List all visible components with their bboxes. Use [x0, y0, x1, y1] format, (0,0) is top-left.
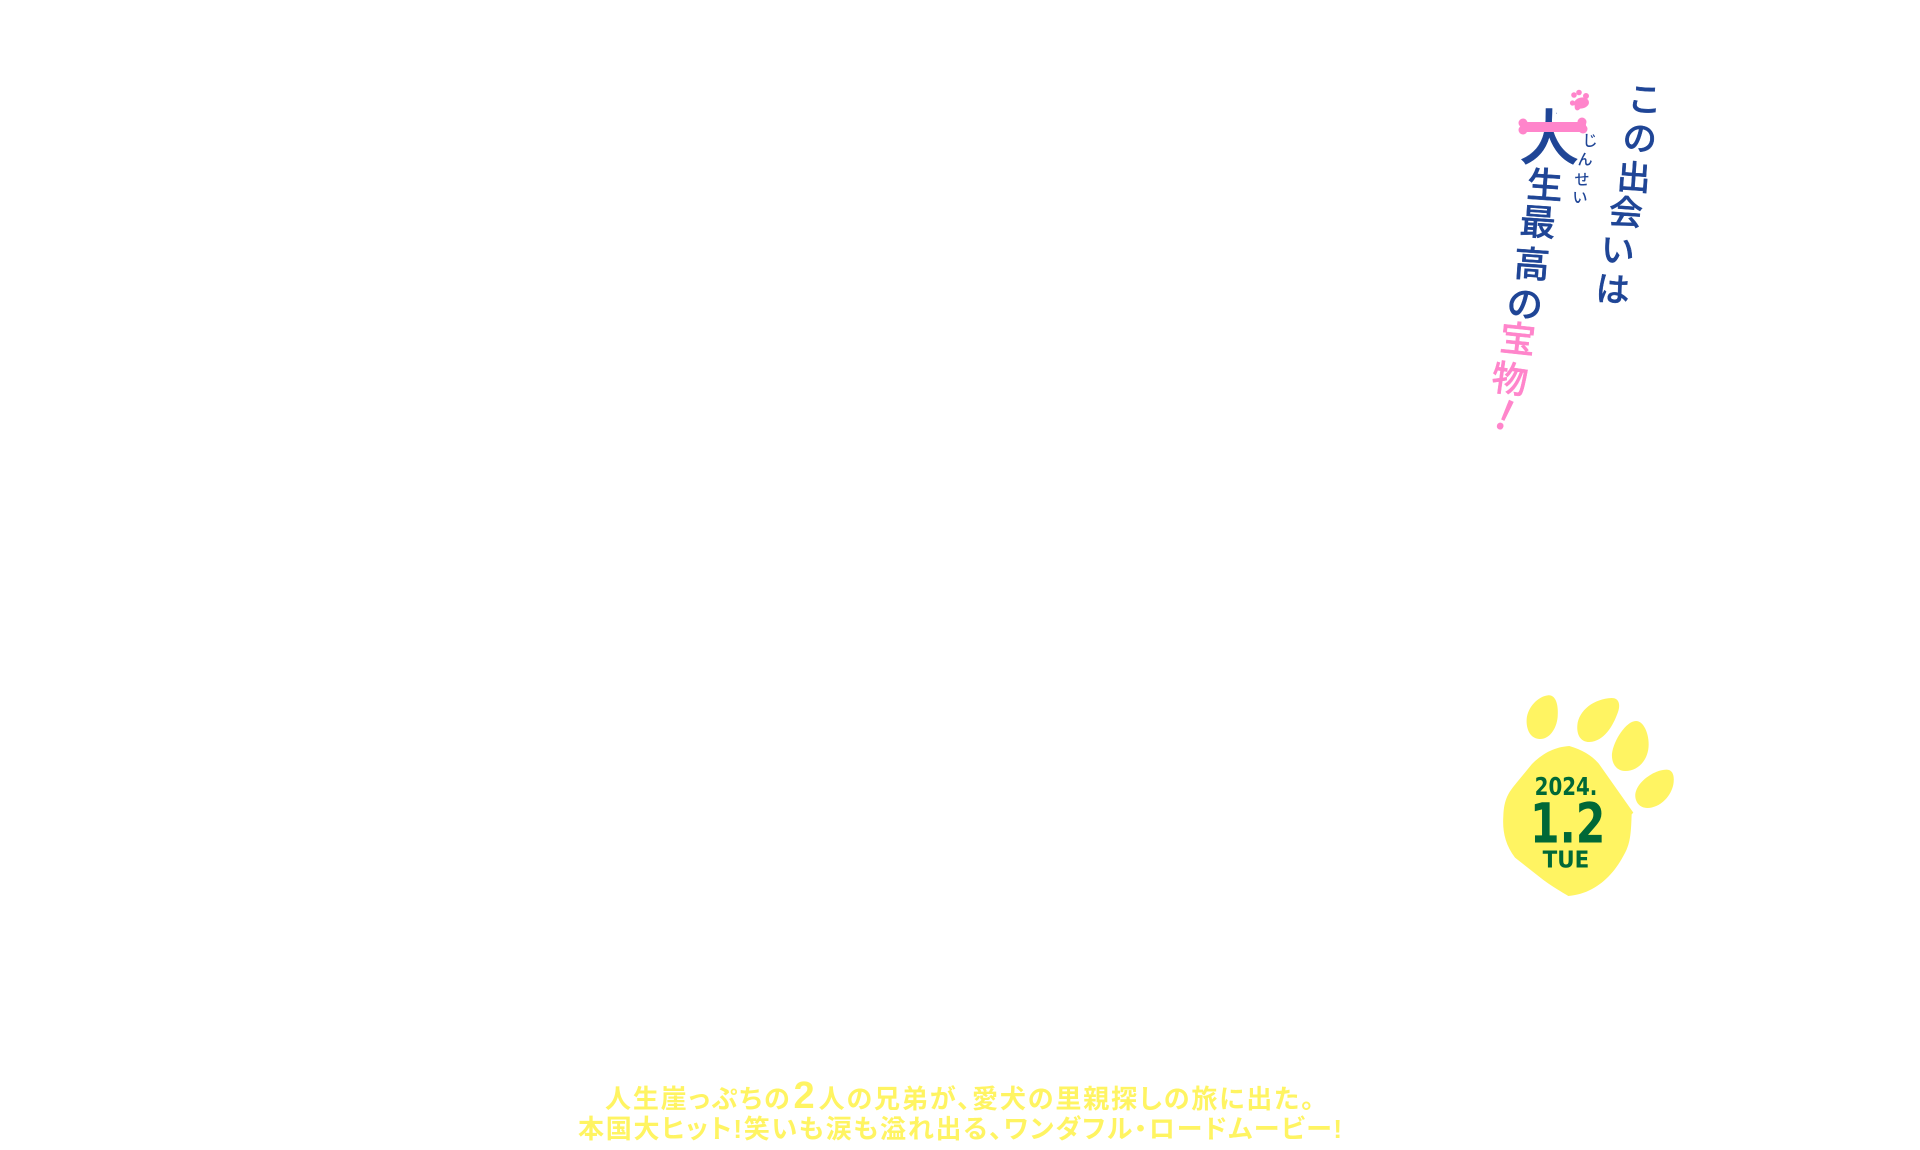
tagline column 1: 会: [1607, 184, 1645, 236]
date day: 1.2: [1530, 791, 1605, 855]
tagline pink word: 宝: [1497, 309, 1539, 365]
tagline column 1: い: [1599, 222, 1637, 274]
tagline pink word: !: [1488, 384, 1524, 442]
tagline column 1: こ: [1626, 71, 1664, 123]
synopsis line 1: 人生崖っぷちの2人の兄弟が、愛犬の里親探しの旅に出た。: [605, 1075, 1316, 1117]
tagline pink word: [1488, 309, 1539, 442]
tagline large dog character: 犬: [1519, 90, 1579, 178]
paw pads: [1503, 695, 1674, 896]
tagline column 2: 高: [1512, 235, 1552, 289]
synopsis line 2: 本国大ヒット!笑いも涙も溢れ出る、ワンダフル・ロードムービー!: [578, 1114, 1344, 1144]
tagline ruby: い: [1572, 186, 1588, 208]
date weekday: TUE: [1543, 846, 1589, 874]
tagline column 2: の: [1505, 275, 1545, 329]
tagline column 1: [1594, 71, 1664, 313]
tagline column 1: は: [1594, 261, 1632, 313]
tagline column 1: の: [1621, 110, 1659, 162]
tagline column 2: 最: [1518, 193, 1558, 247]
mask over the dot of the dog character: [1557, 98, 1583, 124]
icon: pink paw: [1570, 90, 1590, 111]
tagline ruby: じ: [1582, 130, 1598, 150]
tagline ruby: せ: [1574, 168, 1590, 190]
tagline column 1: 出: [1615, 149, 1653, 201]
icon: pink bone: [1518, 118, 1588, 134]
tagline column 2: [1505, 156, 1565, 329]
tagline column 2: 生: [1525, 156, 1565, 210]
tagline ruby: ん: [1577, 148, 1593, 170]
tagline ruby: [1572, 130, 1598, 208]
tagline pink word: 物: [1489, 349, 1531, 405]
date badge: yellow paw: [1503, 695, 1674, 896]
date year: 2024.: [1535, 772, 1597, 801]
